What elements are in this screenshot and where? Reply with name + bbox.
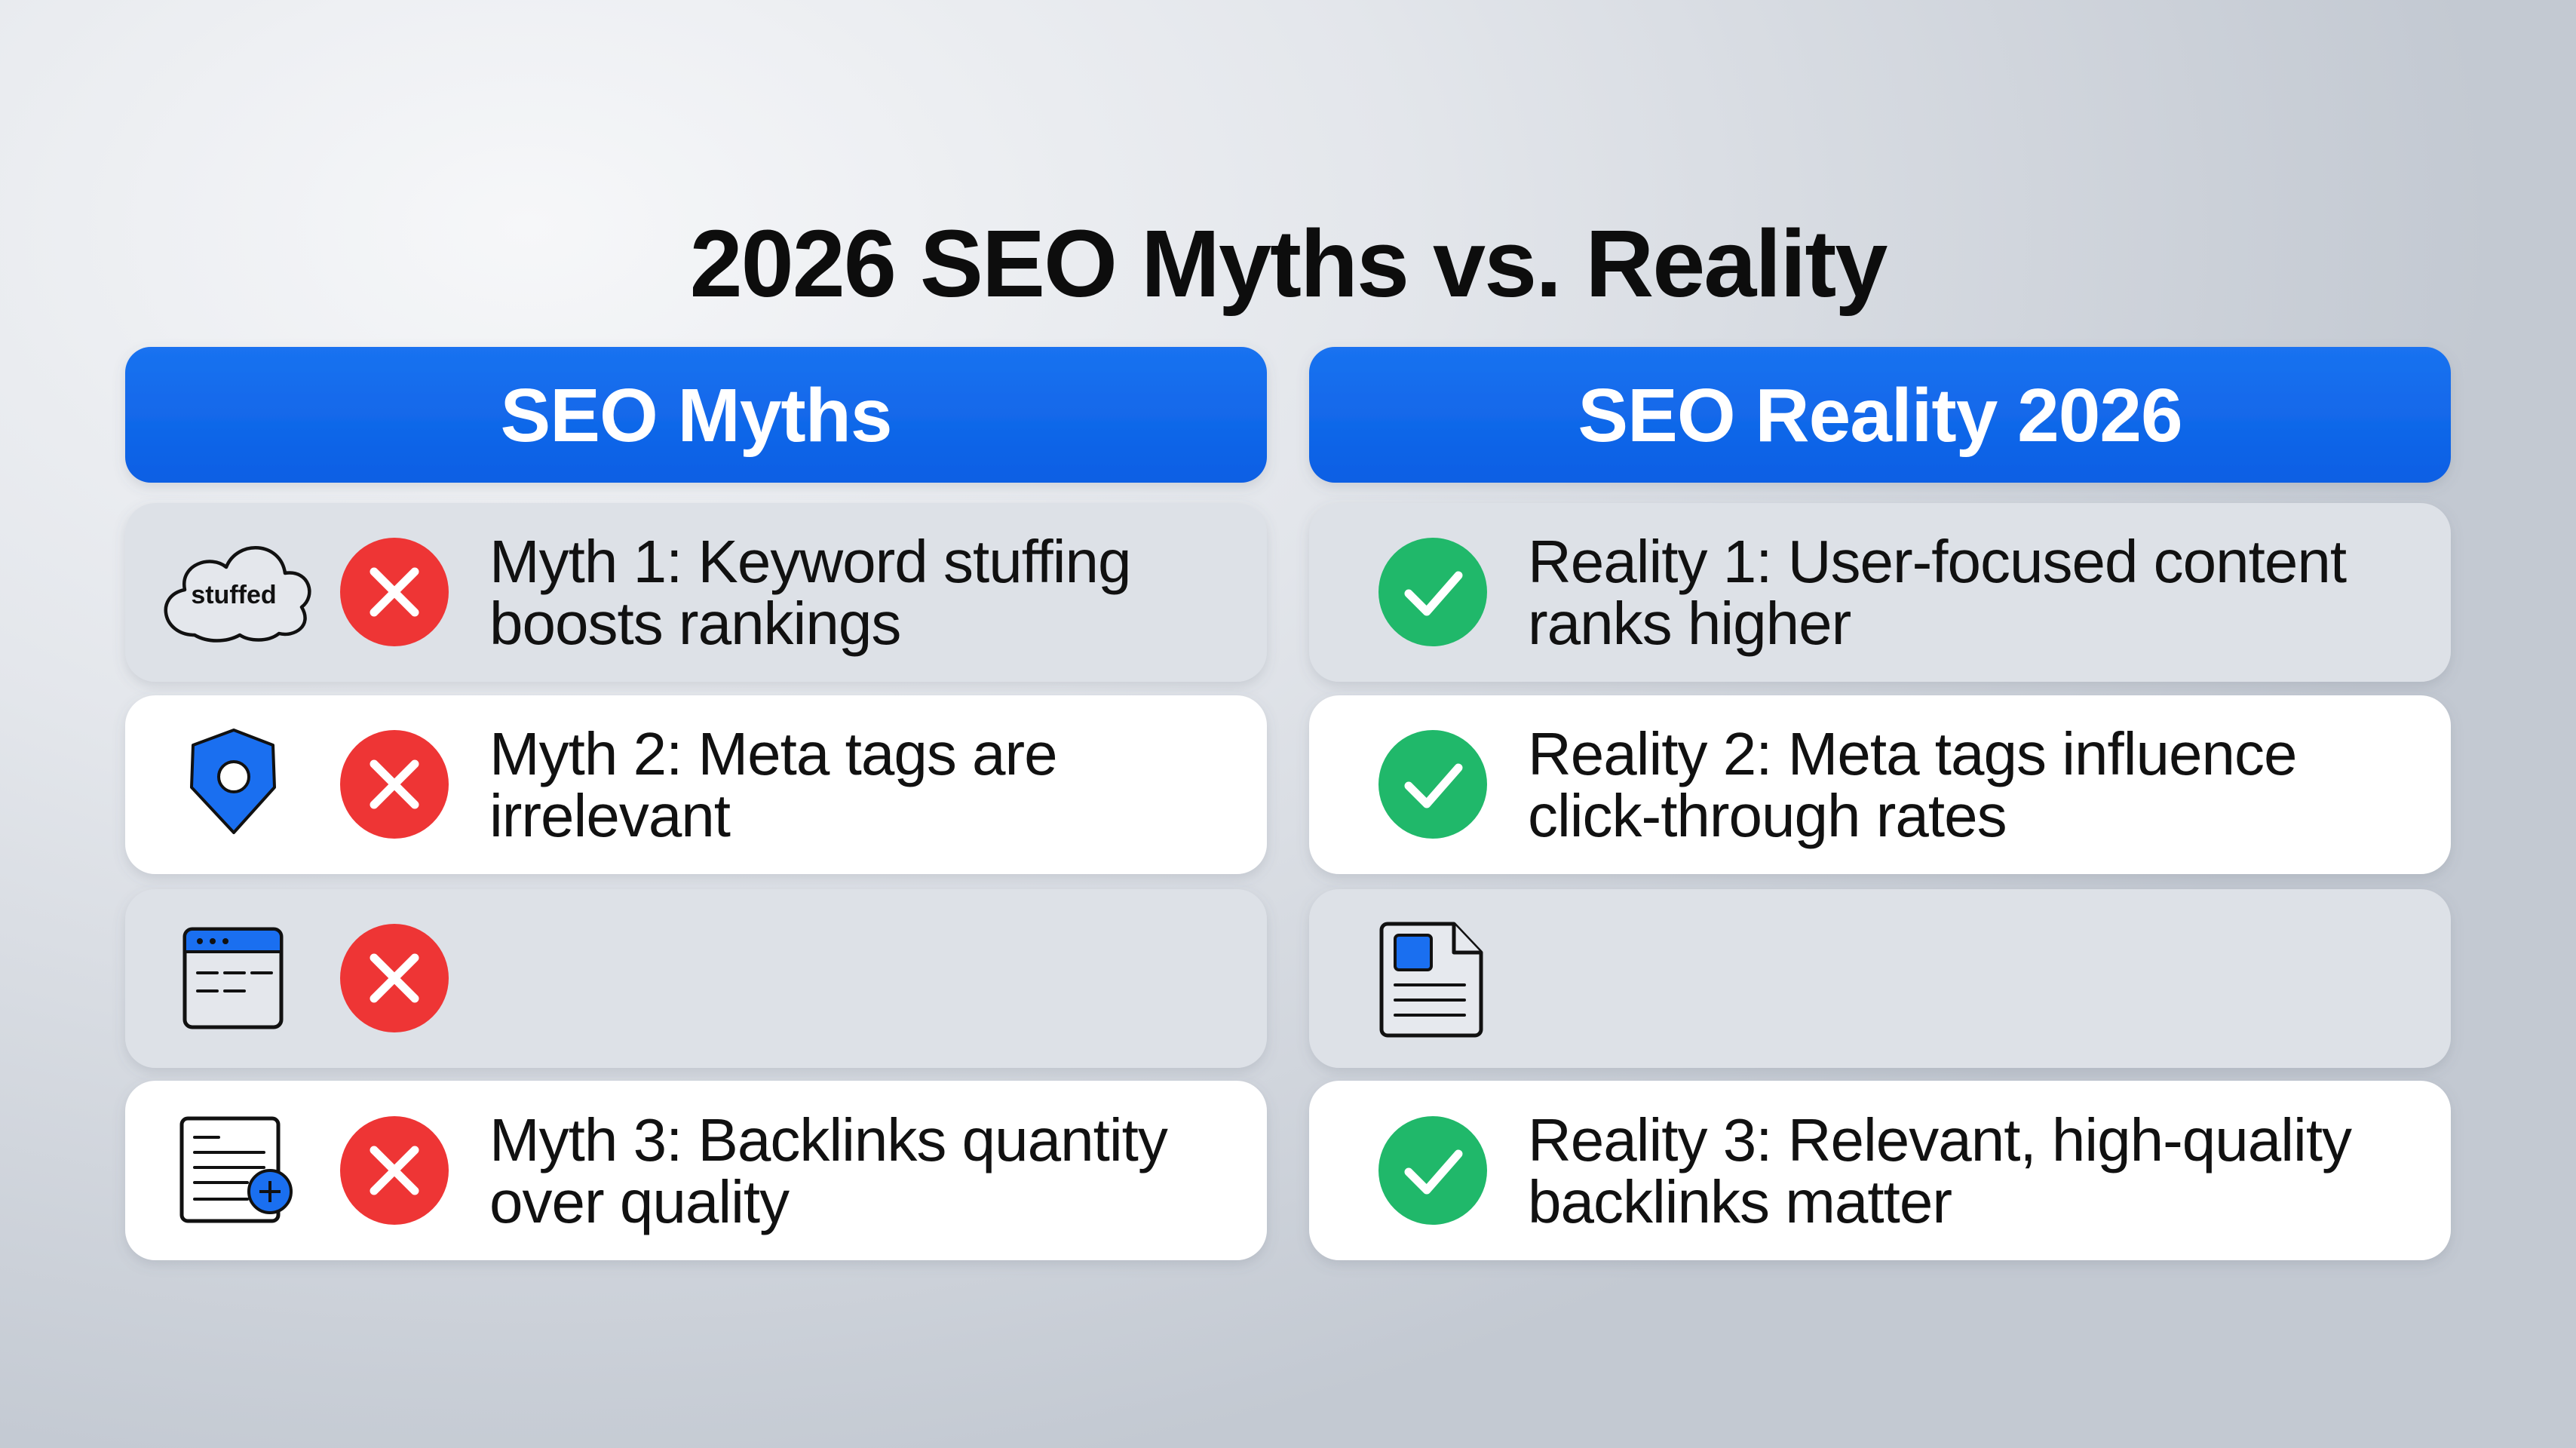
text: myth 2: irrelevant: [489, 782, 731, 849]
text: reality 2: Reality 2: Meta tags influence: [1528, 720, 2296, 787]
text: myth 1: boosts rankings: [489, 590, 900, 657]
text: myth 3: Myth 3: Backlinks quantity: [489, 1106, 1168, 1173]
text: reality 3: backlinks matter: [1528, 1168, 1952, 1235]
text: reality 2: click-through rates: [1528, 782, 2007, 849]
panel: myth row 1: [125, 503, 1267, 682]
text: myth 2: Myth 2: Meta tags are: [489, 720, 1057, 787]
icon: browser window: [185, 929, 281, 1027]
icon: green check: [1378, 1116, 1487, 1225]
icon: cloud stuffed: stuffed: [191, 581, 277, 609]
panel: reality row 1: [1309, 503, 2451, 682]
panel: reality row 3: [1309, 889, 2451, 1068]
panel: myth row 3: [125, 889, 1267, 1068]
icon: cloud stuffed: [166, 548, 309, 641]
icon: blue shield pin: [192, 730, 274, 833]
icon: red x: [340, 1116, 449, 1225]
panel: reality row 2: [1309, 695, 2451, 874]
header: SEO Myths: SEO Myths: [501, 373, 891, 458]
text: reality 1: Reality 1: User-focused content: [1528, 528, 2347, 595]
icon: green check: [1378, 538, 1487, 646]
icon: document with image: [1382, 924, 1481, 1035]
icon: document with plus: [182, 1118, 291, 1221]
text: myth 3: over quality: [489, 1168, 790, 1235]
panel: myth row 2: [125, 695, 1267, 874]
panel: reality row 4: [1309, 1081, 2451, 1260]
header: SEO Myths: [125, 347, 1267, 483]
icon: green check: [1378, 730, 1487, 839]
header: SEO Reality 2026: SEO Reality 2026: [1578, 373, 2182, 458]
icon: red x: [340, 924, 449, 1032]
title: 2026 SEO Myths vs. Reality: [690, 210, 1888, 317]
text: myth 1: Myth 1: Keyword stuffing: [489, 528, 1131, 595]
header: SEO Reality 2026: [1309, 347, 2451, 483]
icon: red x: [340, 538, 449, 646]
text: reality 1: ranks higher: [1528, 590, 1851, 657]
text: reality 3: Reality 3: Relevant, high-quality: [1528, 1106, 2352, 1173]
panel: myth row 4: [125, 1081, 1267, 1260]
icon: red x: [340, 730, 449, 839]
